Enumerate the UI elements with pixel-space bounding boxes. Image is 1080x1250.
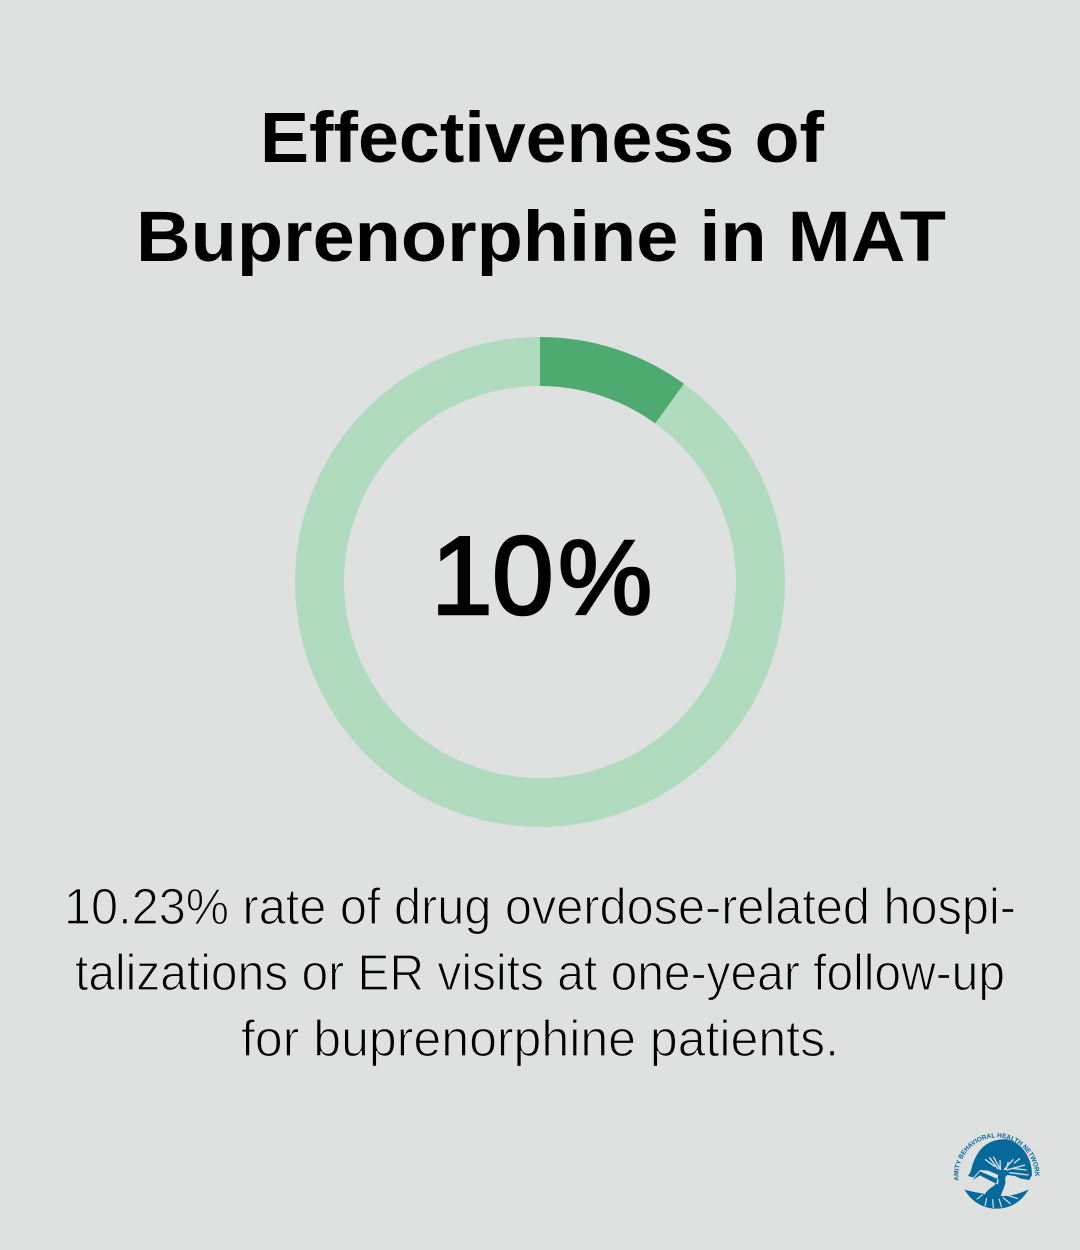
logo tree canopy (968, 1139, 1032, 1180)
logo tree trunk (973, 1170, 1005, 1202)
description text: 10.23% rate of drug overdose-related hospi- (64, 878, 1016, 935)
title: Effectiveness of (260, 99, 824, 178)
donut highlighted segment (540, 337, 684, 423)
title: Buprenorphine in MAT (136, 198, 946, 277)
logo roots (964, 1189, 1029, 1209)
donut center value: % (558, 519, 652, 637)
logo: Amity Behavioral Health Network tree (954, 1132, 1040, 1209)
title (136, 99, 946, 277)
logo wordmark: AMITY BEHAVIORAL HEALTH NETWORK (954, 1132, 1040, 1180)
donut center value: 0 (492, 514, 554, 638)
description text: for buprenorphine patients. (241, 1010, 839, 1067)
description text (64, 878, 1016, 1067)
logo tree branches (985, 1157, 1029, 1177)
donut center value: 1 (431, 514, 493, 638)
donut chart: 10% (320, 337, 760, 802)
description text: talizations or ER visits at one-year follow-up (75, 944, 1005, 1001)
donut track (320, 362, 760, 802)
